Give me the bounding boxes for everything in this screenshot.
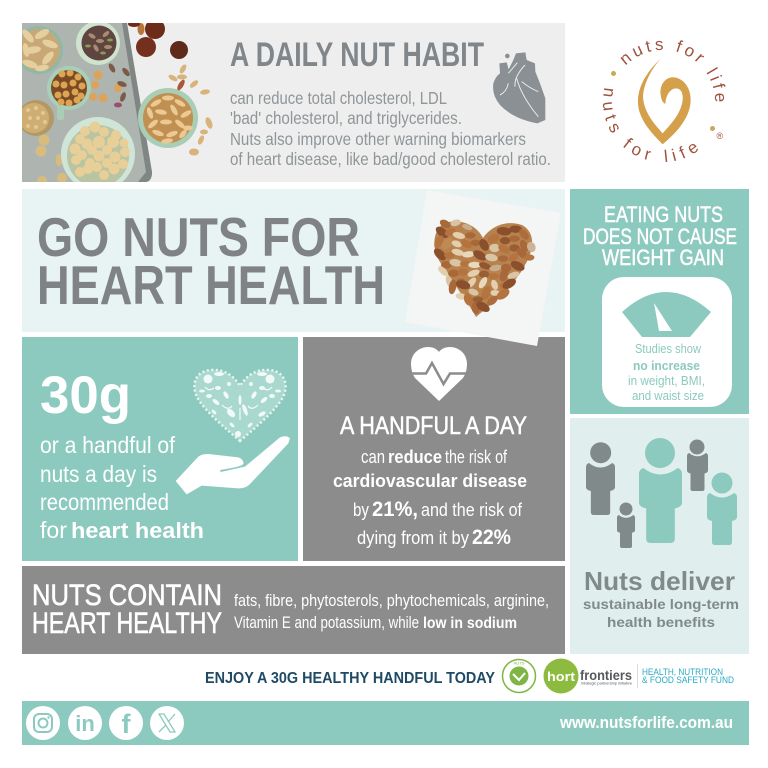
panel: 30g recommendation — [22, 337, 298, 561]
text: risk reduction: dying from it by — [357, 528, 469, 548]
icon: linkedin — [68, 706, 102, 740]
icon: floral heart — [194, 370, 286, 441]
logo: hort frontiers: Strategic partnership initiative — [581, 682, 632, 686]
text: handful recommendation: heart health — [71, 518, 204, 543]
text: cholesterol benefits: of heart disease, like bad/good cholesterol ratio. — [230, 149, 551, 169]
panel: nuts deliver — [570, 418, 749, 654]
text: cholesterol benefits — [230, 88, 551, 169]
icon: heart with pulse — [410, 347, 468, 401]
text: risk reduction: can — [361, 447, 385, 467]
panel: nuts contain heart healthy — [22, 566, 565, 654]
icon: healthy handful badge: NUTS — [514, 660, 525, 666]
text: 30g: 30g — [40, 366, 131, 425]
text: long-term benefits: sustainable long-term — [583, 596, 739, 612]
title: HEART HEALTH — [37, 254, 385, 316]
text: cholesterol benefits: 'bad' cholesterol, and triglycerides. — [230, 108, 462, 128]
text: long-term benefits — [583, 596, 739, 630]
icon: facebook: f — [122, 709, 132, 739]
text: cholesterol benefits: Nuts also improve other warning biomarkers — [230, 129, 526, 149]
logo: hort frontiers: HEALTH, NUTRITION — [642, 667, 723, 678]
image: heart of nuts on paper — [405, 190, 561, 346]
heading: a daily nut habit: A DAILY NUT HABIT — [230, 36, 484, 74]
icon: x — [150, 706, 184, 740]
heading: nuts contain — [32, 579, 222, 640]
icon: facebook — [109, 706, 143, 740]
text: risk reduction: reduce — [388, 447, 442, 467]
text: risk reduction: the risk of — [445, 447, 508, 467]
logo: hort frontiers — [544, 658, 734, 694]
logo: hort frontiers: & FOOD SAFETY FUND — [642, 675, 734, 686]
call to action: ENJOY A 30G HEALTHY HANDFUL TODAY — [205, 670, 496, 687]
text: no increase — [628, 342, 705, 403]
text: risk reduction: 22% — [472, 526, 511, 549]
icon: group of people — [586, 438, 737, 548]
logo: nuts for life: nuts for life — [620, 40, 726, 102]
text: cholesterol benefits: can reduce total cholesterol, LDL — [230, 88, 447, 108]
heading: weight gain: EATING NUTS — [604, 202, 723, 227]
heading: nuts deliver: Nuts deliver — [584, 566, 735, 596]
text: nutrient list — [234, 591, 549, 632]
text: risk reduction: and the risk of — [421, 500, 523, 520]
heading: weight gain: WEIGHT GAIN — [602, 245, 724, 270]
heading: nuts contain: NUTS CONTAIN — [32, 579, 222, 612]
panel: eating nuts does not cause weight gain — [570, 189, 749, 414]
text: no increase: Studies show — [635, 342, 702, 356]
text: handful recommendation: for — [40, 517, 67, 543]
logo: nuts for life: nuts for life — [602, 88, 698, 162]
text: handful recommendation — [40, 432, 204, 543]
logo: nuts for life: ® — [716, 131, 724, 141]
heading: nuts contain: HEART HEALTHY — [32, 607, 222, 640]
text: risk reduction: by — [353, 500, 369, 520]
text: nutrient list: fats, fibre, phytosterols, phytochemicals, arginine, — [234, 591, 549, 610]
title — [37, 206, 385, 316]
text: risk reduction: 21%, — [372, 498, 418, 521]
heading: weight gain — [583, 202, 737, 270]
icon: healthy handful badge — [502, 660, 536, 692]
logo: nuts for life — [602, 40, 726, 162]
text: risk reduction — [333, 447, 527, 549]
text: handful recommendation: nuts a day is — [40, 461, 157, 487]
logo: hort frontiers: hort — [547, 669, 576, 684]
text: no increase: and waist size — [632, 389, 704, 403]
panel: a handful a day — [303, 337, 565, 561]
icon: weighing scale — [602, 277, 732, 407]
title: GO NUTS FOR — [37, 206, 360, 268]
panel: go nuts for heart health — [22, 189, 565, 332]
icon: linkedin: in — [75, 711, 95, 736]
panel: a daily nut habit — [15, 19, 565, 191]
icon: instagram — [26, 706, 60, 740]
logo: hort frontiers: frontiers — [580, 667, 632, 683]
heading: a handful a day: A HANDFUL A DAY — [340, 412, 527, 440]
text: nutrient list: Vitamin E and potassium, while — [234, 613, 419, 632]
photo: bowls of nuts on tray — [22, 23, 212, 182]
text: handful recommendation: recommended — [40, 489, 169, 515]
text: no increase: no increase — [633, 359, 700, 373]
text: no increase: in weight, BMI, — [628, 374, 705, 388]
text: website: www.nutsforlife.com.au — [559, 713, 733, 732]
text: risk reduction: cardiovascular disease — [333, 471, 527, 491]
footer bar — [22, 701, 749, 745]
text: handful recommendation: or a handful of — [40, 432, 176, 458]
text: nutrient list: low in sodium — [423, 615, 517, 632]
icon: anatomical heart — [493, 52, 545, 123]
icon: open hand — [176, 436, 290, 494]
text: long-term benefits: health benefits — [607, 614, 715, 630]
